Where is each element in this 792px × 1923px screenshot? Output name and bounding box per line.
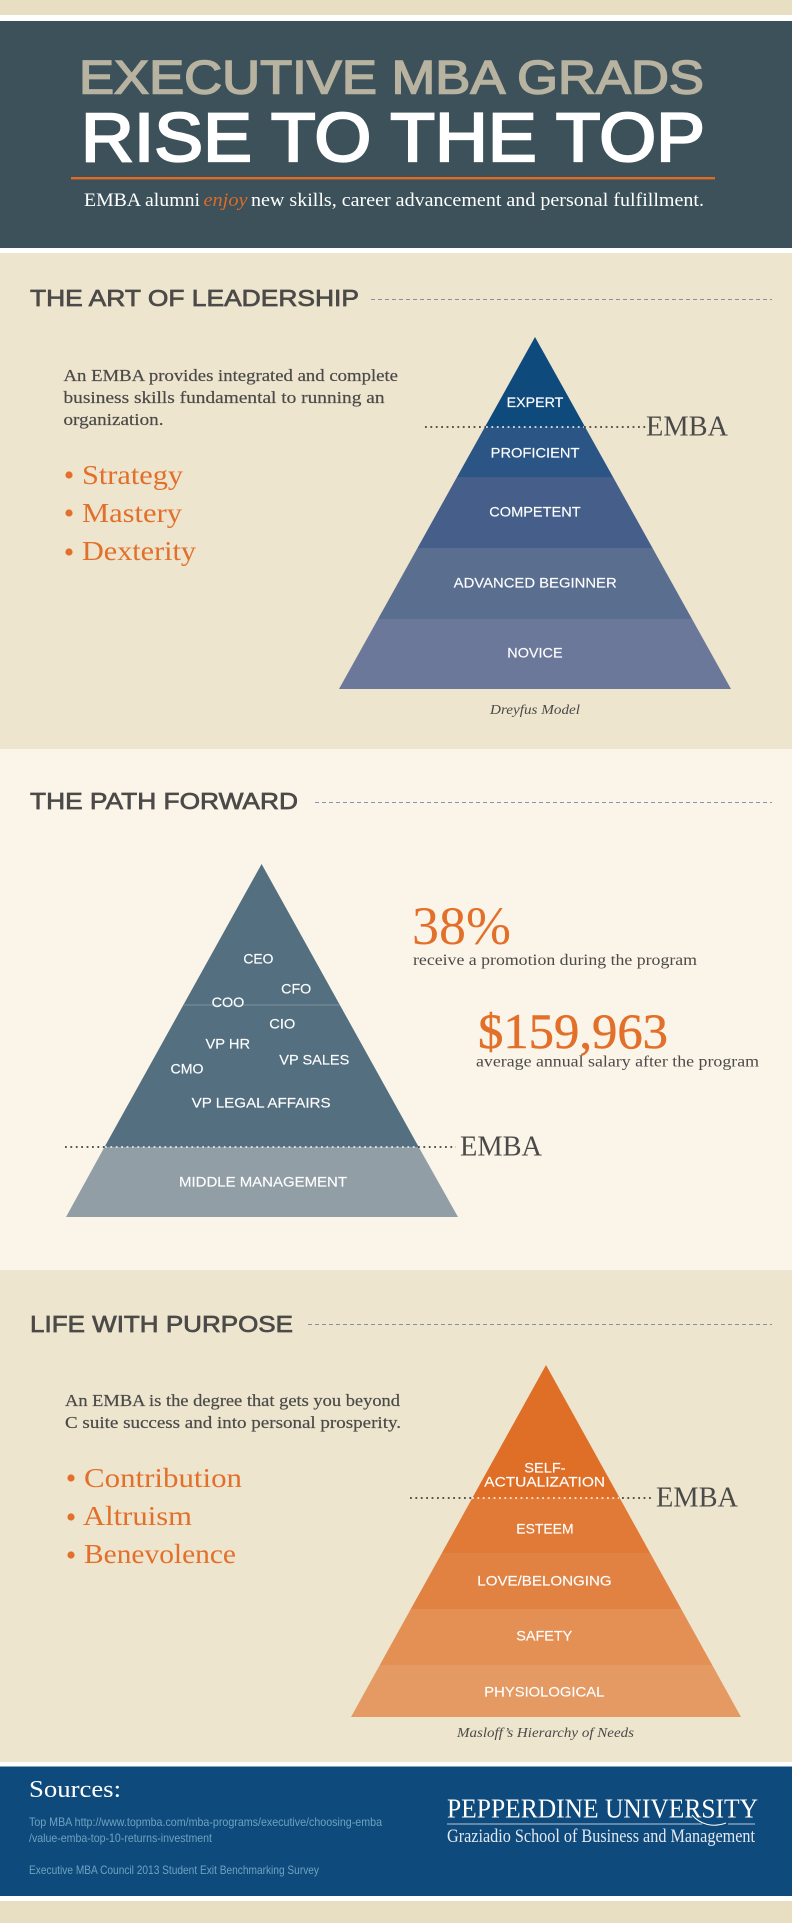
- pyramid: hierarchy of needs: SAFETY: [516, 1627, 573, 1643]
- university logo: PEPPERDINE UNIVERSITY: [447, 1794, 758, 1824]
- tagline: [84, 190, 704, 211]
- bullet list: skills: Mastery: [82, 498, 183, 528]
- EMBA marker: EMBA: [646, 410, 728, 442]
- tagline: new skills, career advancement and personal fulfillment.: [251, 190, 704, 211]
- bullet list: skills: Dexterity: [82, 536, 197, 566]
- bullet list: values: Contribution: [84, 1463, 243, 1493]
- pyramid: Dreyfus model: [339, 337, 731, 689]
- intro paragraph: [64, 366, 398, 429]
- pyramid: Dreyfus model: EXPERT: [507, 394, 564, 410]
- panel: the path forward: [0, 749, 792, 1270]
- caption: Dreyfus Model: Dreyfus Model: [489, 702, 580, 717]
- heading: the path forward: THE PATH FORWARD: [30, 788, 298, 814]
- pyramid: corporate ladder: CEO: [243, 950, 274, 966]
- stat: 38 percent promotion: [412, 896, 698, 969]
- sources heading: Sources:: [29, 1777, 121, 1803]
- university logo: [447, 1794, 758, 1847]
- source list: /value-emba-top-10-returns-investment: [29, 1831, 213, 1845]
- stat: average salary: average annual salary after the program: [476, 1054, 760, 1070]
- EMBA marker: EMBA: [656, 1482, 738, 1514]
- pyramid: corporate ladder: CIO: [269, 1015, 295, 1031]
- bullet list: skills: [65, 460, 197, 566]
- intro paragraph: [65, 1391, 401, 1432]
- bullet list: skills: Strategy: [82, 460, 184, 490]
- panel: life with purpose: [0, 1270, 792, 1762]
- stat: 38 percent promotion: receive a promotion during the program: [413, 952, 698, 969]
- title line two: RISE TO THE TOP: [81, 99, 705, 176]
- pyramid: Dreyfus model: PROFICIENT: [491, 445, 580, 461]
- panel: the art of leadership: [0, 253, 792, 749]
- heading: the art of leadership: THE ART OF LEADERSHIP: [30, 285, 359, 311]
- pyramid: hierarchy of needs: LOVE/BELONGING: [477, 1572, 612, 1588]
- intro paragraph: An EMBA is the degree that gets you beyond: [65, 1391, 401, 1410]
- intro paragraph: organization.: [64, 410, 164, 429]
- pyramid: hierarchy of needs: PHYSIOLOGICAL: [484, 1683, 605, 1699]
- bullet list: values: Altruism: [83, 1501, 192, 1531]
- pyramid: corporate ladder: CFO: [281, 980, 311, 996]
- stat: average salary: $159,963: [478, 1003, 668, 1059]
- pyramid: corporate ladder: [65, 864, 458, 1217]
- university logo: Graziadio School of Business and Management: [447, 1827, 756, 1847]
- pyramid: corporate ladder: CMO: [170, 1060, 204, 1076]
- pyramid: Dreyfus model: NOVICE: [507, 644, 563, 660]
- caption: Masloff's Hierarchy of Needs: Masloff’s Hierarchy of Needs: [456, 1725, 634, 1740]
- pyramid: corporate ladder: VP LEGAL AFFAIRS: [192, 1094, 331, 1110]
- pyramid: Dreyfus model: COMPETENT: [489, 503, 581, 519]
- orange rule: [71, 177, 715, 179]
- intro paragraph: C suite success and into personal prosperity.: [65, 1413, 401, 1432]
- EMBA marker: EMBA: [460, 1130, 542, 1162]
- pyramid: Dreyfus model: ADVANCED BEGINNER: [454, 574, 617, 590]
- intro paragraph: business skills fundamental to running an: [64, 388, 385, 407]
- pyramid: corporate ladder: VP HR: [206, 1035, 250, 1051]
- tagline: enjoy: [204, 190, 248, 211]
- source list: [29, 1815, 382, 1877]
- pyramid: corporate ladder: COO: [212, 994, 244, 1010]
- footer panel: [0, 1766, 792, 1896]
- pyramid: hierarchy of needs: ACTUALIZATION: [484, 1473, 605, 1489]
- stat: average salary: [476, 1003, 760, 1070]
- source list: Executive MBA Council 2013 Student Exit Benchmarking Survey: [29, 1863, 319, 1877]
- pyramid: hierarchy of needs: ESTEEM: [516, 1520, 574, 1536]
- header banner: [0, 21, 792, 248]
- stat: 38 percent promotion: 38%: [412, 896, 511, 956]
- title line one: EXECUTIVE MBA GRADS: [79, 52, 704, 104]
- intro paragraph: An EMBA provides integrated and complete: [64, 366, 398, 385]
- bullet list: values: Benevolence: [84, 1539, 236, 1569]
- pyramid: corporate ladder: VP SALES: [279, 1051, 349, 1067]
- source list: Top MBA http://www.topmba.com/mba-programs/executive/choosing-emba: [29, 1815, 382, 1829]
- tagline: EMBA alumni: [84, 190, 200, 211]
- pyramid: hierarchy of needs: [351, 1365, 741, 1717]
- bullet list: values: [67, 1463, 243, 1569]
- heading: life with purpose: LIFE WITH PURPOSE: [30, 1311, 293, 1337]
- pyramid: hierarchy of needs: SELF-: [524, 1459, 566, 1475]
- pyramid: corporate ladder: MIDDLE MANAGEMENT: [179, 1173, 347, 1189]
